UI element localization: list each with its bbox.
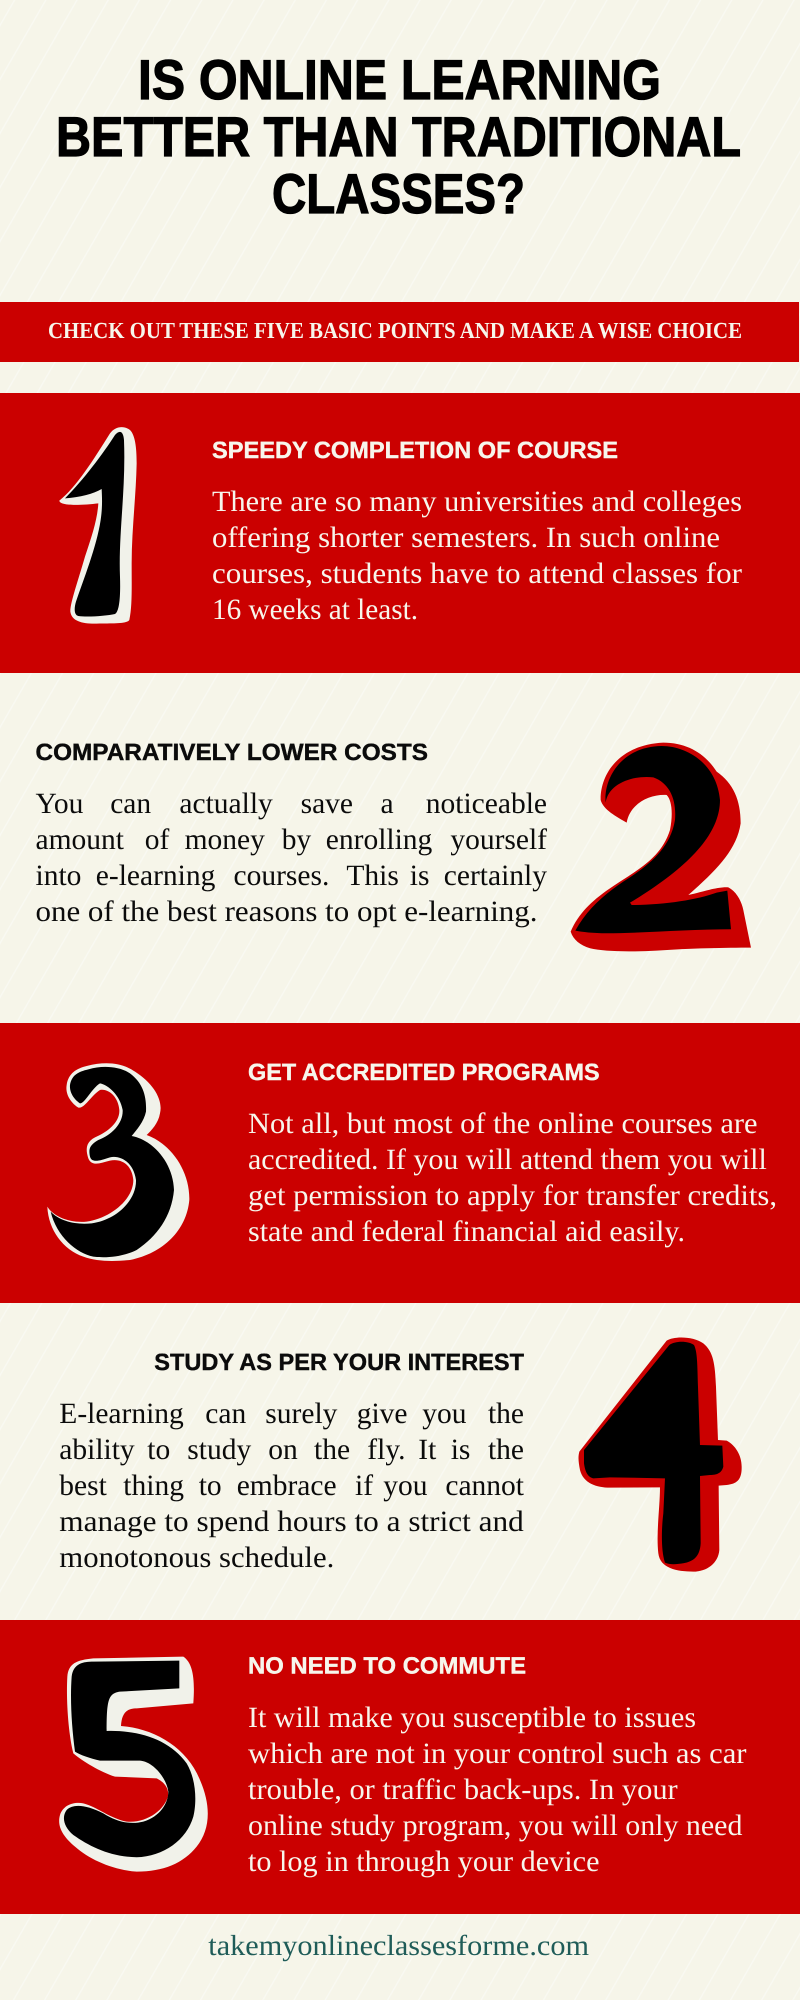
heading: accredited programs: GET ACCREDITED PROGRAMS (248, 1059, 600, 1085)
text block: point 4 body: monotonous schedule. (59, 1542, 334, 1574)
title (56, 48, 741, 225)
heading: no need to commute: NO NEED TO COMMUTE (248, 1652, 526, 1678)
text block: point 2 body (36, 788, 547, 928)
text block: point 4 body: thing (123, 1470, 184, 1502)
icon: number 1 (59, 427, 137, 624)
panel: point 2 (36, 739, 751, 951)
text block: point 4 body: on (268, 1434, 298, 1466)
text block: point 3 body: accredited. If you will attend them you will (248, 1144, 767, 1176)
text block: point 3 body (248, 1108, 777, 1248)
text block: point 5 body: It will make you susceptible to issues (248, 1702, 696, 1734)
text block: point 4 body: surely (265, 1398, 338, 1430)
text block: point 2 body: one of the best reasons to opt e-learning. (36, 896, 538, 928)
text block: point 4 body: if (355, 1470, 373, 1502)
title: IS ONLINE LEARNING (138, 48, 661, 111)
text block: point 2 body: can (110, 788, 151, 820)
text block: point 2 body: is (410, 860, 429, 892)
text block: point 2 body: by (282, 824, 311, 856)
text block: point 4 body: you (422, 1398, 467, 1430)
text block: point 5 body: online study program, you will only need (248, 1810, 743, 1842)
text block: point 3 body: state and federal financial aid easily. (248, 1216, 685, 1248)
heading: study as per your interest: STUDY AS PER YOUR INTEREST (154, 1349, 525, 1375)
text block: point 4 body: the (488, 1398, 524, 1430)
text block: point 5 body: which are not in your control such as car (248, 1738, 747, 1770)
text block: point 5 body: trouble, or traffic back-ups. In your (248, 1774, 678, 1806)
text block: point 4 body: manage to spend hours to a strict and (59, 1506, 524, 1538)
text block: point 1 body: There are so many universities and colleges (212, 486, 742, 518)
text block: point 2 body: of (145, 824, 169, 856)
title: CLASSES? (272, 162, 525, 225)
text block: point 3 body: Not all, but most of the online courses are (248, 1108, 758, 1140)
text block: point 2 body: courses. (234, 860, 329, 892)
text block: point 4 body: give (357, 1398, 407, 1430)
icon: number 5 (59, 1657, 208, 1872)
text block: point 4 body: to (147, 1434, 170, 1466)
text block: point 4 body: you (383, 1470, 428, 1502)
panel: point 1 (0, 393, 800, 673)
footer: website: takemyonlineclassesforme.com (208, 1930, 589, 1962)
text block: point 1 body: offering shorter semesters. In such online (212, 522, 720, 554)
heading: speedy completion: SPEEDY COMPLETION OF COURSE (212, 437, 618, 463)
text block: point 2 body: This (346, 860, 399, 892)
text block: point 4 body: embrace (237, 1470, 337, 1502)
text block: point 5 body: to log in through your device (248, 1846, 600, 1878)
text block: point 4 body (59, 1398, 525, 1574)
text block: point 2 body: amount (36, 824, 125, 856)
text block: point 4 body: It (418, 1434, 437, 1466)
text block: point 5 body (248, 1702, 747, 1878)
text block: point 4 body: fly. (367, 1434, 406, 1466)
text block: point 4 body: best (59, 1470, 108, 1502)
icon: number 3 (47, 1063, 189, 1261)
text block: point 2 body: enrolling (326, 824, 433, 856)
text block: point 4 body: ability (59, 1434, 135, 1466)
text block: point 4 body: can (205, 1398, 246, 1430)
text block: point 4 body: cannot (445, 1470, 525, 1502)
icon: number 4 (579, 1337, 742, 1572)
text block: point 2 body: money (185, 824, 265, 856)
text block: point 4 body: the (314, 1434, 350, 1466)
panel: point 5 (0, 1620, 800, 1914)
text block: point 2 body: actually (179, 788, 273, 820)
text block: point 4 body: to (199, 1470, 222, 1502)
text block: point 4 body: study (187, 1434, 251, 1466)
heading: lower costs: COMPARATIVELY LOWER COSTS (36, 739, 428, 765)
icon: number 2 (571, 743, 751, 951)
text block: point 4 body: the (488, 1434, 524, 1466)
text block: point 2 body: into (36, 860, 81, 892)
text block: point 2 body: save (301, 788, 353, 820)
text block: point 4 body: is (451, 1434, 470, 1466)
text block: point 1 body: courses, students have to attend classes for (212, 558, 742, 590)
text block: point 1 body: 16 weeks at least. (212, 594, 418, 626)
panel: point 3 (0, 1023, 800, 1303)
text block: point 2 body: a (380, 788, 394, 820)
text block: point 2 body: certainly (444, 860, 547, 892)
banner: intro strip: CHECK OUT THESE FIVE BASIC POINTS AND MAKE A WISE CHOICE (48, 318, 742, 343)
text block: point 2 body: yourself (450, 824, 547, 856)
text block: point 2 body: noticeable (426, 788, 547, 820)
banner: intro strip (0, 302, 799, 362)
text block: point 1 body (212, 486, 742, 626)
text block: point 4 body: E-learning (59, 1398, 184, 1430)
text block: point 3 body: get permission to apply for transfer credits, (248, 1180, 777, 1212)
text block: point 2 body: You (36, 788, 84, 820)
panel: point 4 (59, 1337, 742, 1574)
text block: point 2 body: e-learning (96, 860, 216, 892)
